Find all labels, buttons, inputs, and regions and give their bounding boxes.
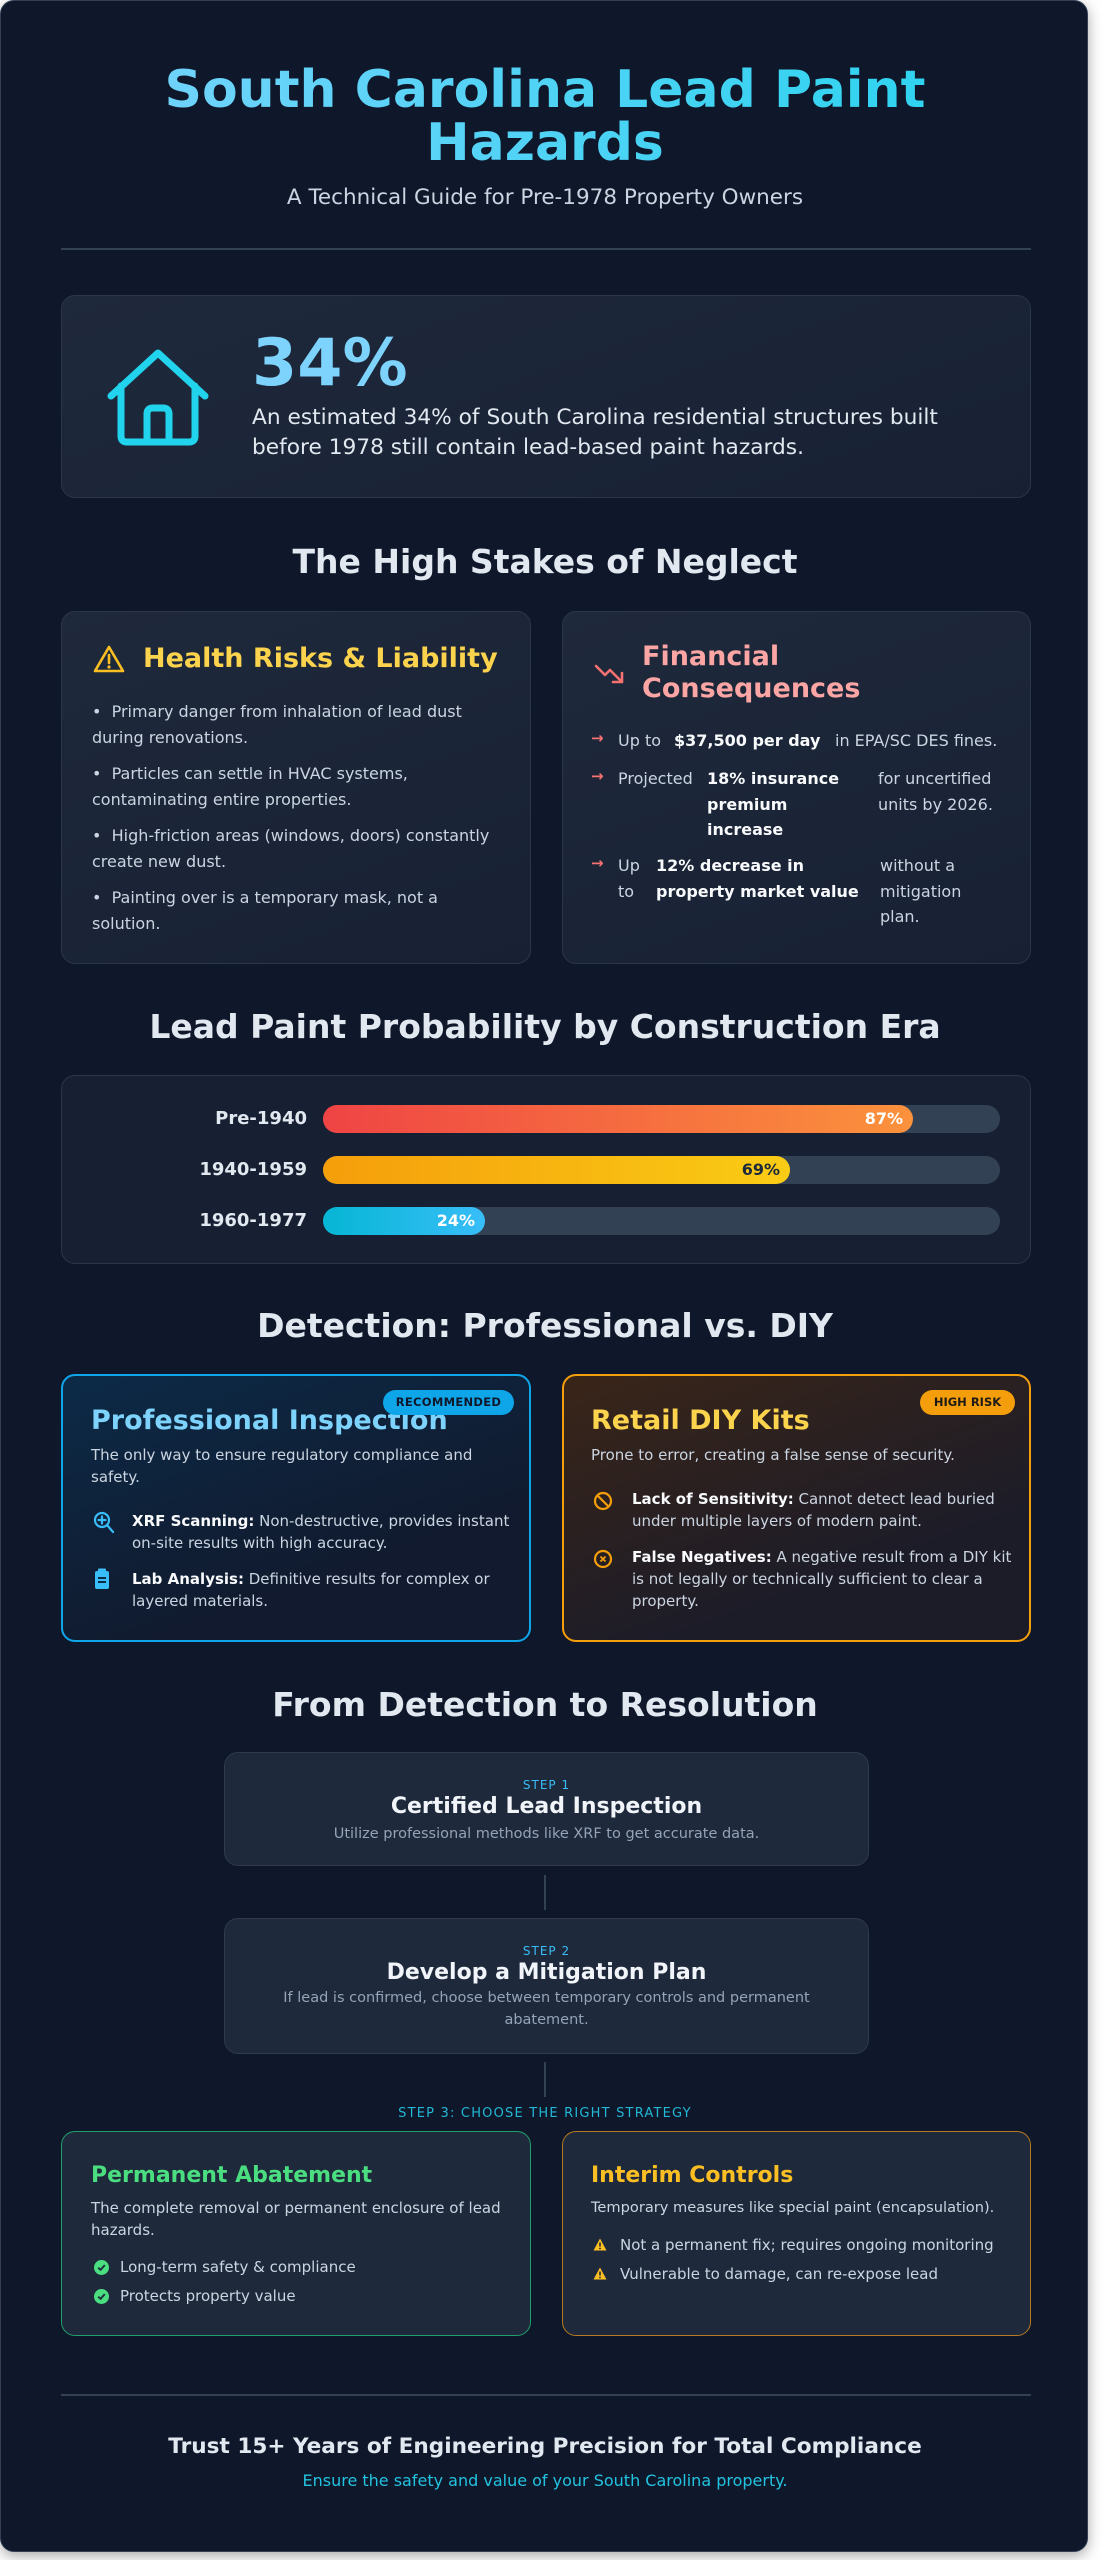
- panel: interim controls: Temporary measures like special paint (encapsulation).: [591, 2199, 994, 2216]
- bar chart: [61, 1075, 1031, 1264]
- panel: health risks: [61, 611, 531, 964]
- main card: 24%: [437, 1211, 475, 1230]
- health bullets: • Primary danger from inhalation of lead dust: [92, 702, 462, 721]
- icon: warning: [94, 646, 124, 672]
- step 1: [224, 1752, 869, 1866]
- icon: trending down: [594, 664, 624, 684]
- panel: financial consequences: [562, 611, 1031, 964]
- panel: permanent abatement: The complete removal or permanent enclosure of lead: [91, 2199, 501, 2217]
- main card: 1940-1959: [199, 1159, 307, 1180]
- sensitivity item: Lack of Sensitivity: Cannot detect lead buried: [632, 1490, 995, 1508]
- heading: detection: Detection: Professional vs. DIY: [257, 1306, 833, 1345]
- false negatives item: [632, 1548, 1012, 1610]
- icon: check: [94, 2260, 109, 2275]
- panel: permanent abatement: Protects property value: [120, 2287, 296, 2305]
- subtitle: A Technical Guide for Pre-1978 Property Owners: [287, 185, 803, 210]
- panel: interim controls: [562, 2131, 1031, 2336]
- stat description: before 1978 still contain lead-based paint hazards.: [252, 435, 804, 460]
- badge: high risk: [920, 1390, 1015, 1415]
- step 1: STEP 1: [523, 1778, 570, 1792]
- pro subtitle: [90, 1446, 472, 1486]
- financial heading: Financial: [642, 641, 779, 672]
- financial items: without a: [880, 856, 955, 875]
- financial items: property market value: [656, 882, 859, 900]
- health heading: Health Risks & Liability: [143, 643, 498, 674]
- health bullets: • Painting over is a temporary mask, not a: [92, 888, 438, 907]
- title: Hazards: [426, 113, 664, 173]
- icon: magnifier: [94, 1512, 114, 1534]
- financial heading: Consequences: [642, 673, 860, 704]
- lab item: [132, 1570, 490, 1610]
- false negatives item: is not legally or technically sufficient to clear a: [632, 1570, 983, 1588]
- health bullets: during renovations.: [92, 728, 248, 746]
- big stat: 34%: [252, 326, 408, 401]
- XRF item: on-site results with high accuracy.: [132, 1534, 387, 1552]
- financial items: →: [591, 729, 604, 747]
- stat description: An estimated 34% of South Carolina residential structures built: [252, 405, 938, 430]
- panel: permanent abatement: [61, 2131, 531, 2336]
- panel: permanent abatement: Long-term safety & compliance: [120, 2258, 356, 2276]
- panel: DIY kits: [562, 1374, 1031, 1642]
- financial items: for uncertified: [878, 769, 991, 788]
- stat box: 34%: [61, 295, 1031, 498]
- sensitivity item: under multiple layers of modern paint.: [632, 1512, 922, 1530]
- panel: interim controls: Vulnerable to damage, can re-expose lead: [620, 2265, 938, 2283]
- icon: check: [94, 2289, 109, 2304]
- health bullets: • Particles can settle in HVAC systems,: [92, 764, 408, 783]
- financial heading: [642, 641, 860, 704]
- health bullets: solution.: [92, 914, 160, 932]
- financial items: plan.: [880, 907, 920, 926]
- DIY title: Retail DIY Kits: [591, 1405, 810, 1436]
- XRF item: XRF Scanning: Non-destructive, provides instant: [132, 1512, 509, 1530]
- icon: house: [108, 350, 208, 446]
- financial items: to: [618, 882, 634, 900]
- step 2: [224, 1918, 869, 2054]
- lab item: layered materials.: [132, 1592, 268, 1610]
- footer subline: Ensure the safety and value of your South Carolina property.: [302, 2471, 788, 2490]
- financial items: $37,500 per day: [674, 731, 820, 750]
- badge: recommended: [383, 1390, 514, 1415]
- icon: x circle: [594, 1550, 612, 1568]
- pro subtitle: The only way to ensure regulatory compliance and: [91, 1446, 472, 1464]
- step 1: Utilize professional methods like XRF to get accurate data.: [334, 1826, 759, 1842]
- panel: permanent abatement: hazards.: [91, 2221, 155, 2239]
- step 3 label: STEP 3: CHOOSE THE RIGHT STRATEGY: [398, 2106, 692, 2121]
- DIY subtitle: Prone to error, creating a false sense of security.: [591, 1446, 955, 1464]
- step 1: Certified Lead Inspection: [391, 1794, 702, 1819]
- icon: warning small: [594, 2268, 606, 2280]
- health bullets: contaminating entire properties.: [92, 790, 351, 808]
- health bullets: • High-friction areas (windows, doors) constantly: [92, 826, 489, 845]
- badge: high risk: HIGH RISK: [934, 1395, 1001, 1409]
- main card: 1960-1977: [199, 1210, 307, 1231]
- step 2: Develop a Mitigation Plan: [387, 1960, 706, 1985]
- panel: permanent abatement: Permanent Abatement: [91, 2163, 372, 2188]
- main card: 87%: [865, 1109, 903, 1128]
- footer CTA: Trust 15+ Years of Engineering Precision for Total Compliance: [168, 2434, 922, 2459]
- XRF item: [132, 1512, 510, 1552]
- health bullets: create new dust.: [92, 852, 226, 870]
- icon: clipboard: [95, 1568, 109, 1589]
- sensitivity item: [632, 1490, 995, 1530]
- icon: warning small: [594, 2238, 606, 2250]
- financial items: →: [591, 854, 604, 872]
- financial items: Up: [618, 856, 640, 875]
- health bullets: [92, 702, 489, 932]
- financial items: premium: [707, 794, 787, 814]
- panel: professional inspection: [61, 1374, 531, 1642]
- financial items: in EPA/SC DES fines.: [835, 731, 997, 750]
- main card: Pre-1940: [215, 1108, 307, 1129]
- panel: interim controls: Interim Controls: [591, 2163, 793, 2188]
- financial items: increase: [707, 820, 783, 839]
- false negatives item: False Negatives: A negative result from a DIY kit: [632, 1548, 1011, 1566]
- stat description: [252, 405, 938, 460]
- financial items: [591, 729, 997, 926]
- step 2: STEP 2: [523, 1944, 570, 1958]
- financial items: mitigation: [880, 882, 961, 900]
- heading: high stakes: The High Stakes of Neglect: [293, 542, 797, 581]
- panel: interim controls: Not a permanent fix; requires ongoing monitoring: [620, 2236, 994, 2254]
- step 2: abatement.: [504, 2012, 589, 2028]
- pro title: Professional Inspection: [91, 1405, 448, 1436]
- false negatives item: property.: [632, 1592, 699, 1610]
- financial items: units by 2026.: [878, 794, 993, 814]
- financial items: Up to: [618, 731, 661, 750]
- title: [1, 64, 1089, 170]
- financial items: Projected: [618, 769, 693, 788]
- heading: resolution: From Detection to Resolution: [272, 1685, 818, 1724]
- lab item: Lab Analysis: Definitive results for complex or: [132, 1570, 490, 1588]
- badge: recommended: RECOMMENDED: [396, 1395, 501, 1409]
- pro subtitle: safety.: [91, 1468, 140, 1486]
- financial items: →: [591, 767, 604, 785]
- heading: probability: Lead Paint Probability by Construction Era: [149, 1007, 941, 1046]
- financial items: 12% decrease in: [656, 856, 804, 875]
- icon: ban: [594, 1492, 612, 1510]
- title: South Carolina Lead Paint: [164, 60, 925, 120]
- financial items: 18% insurance: [707, 769, 839, 788]
- step 2: If lead is confirmed, choose between temporary controls and permanent: [283, 1990, 810, 2006]
- main card: 69%: [742, 1160, 780, 1179]
